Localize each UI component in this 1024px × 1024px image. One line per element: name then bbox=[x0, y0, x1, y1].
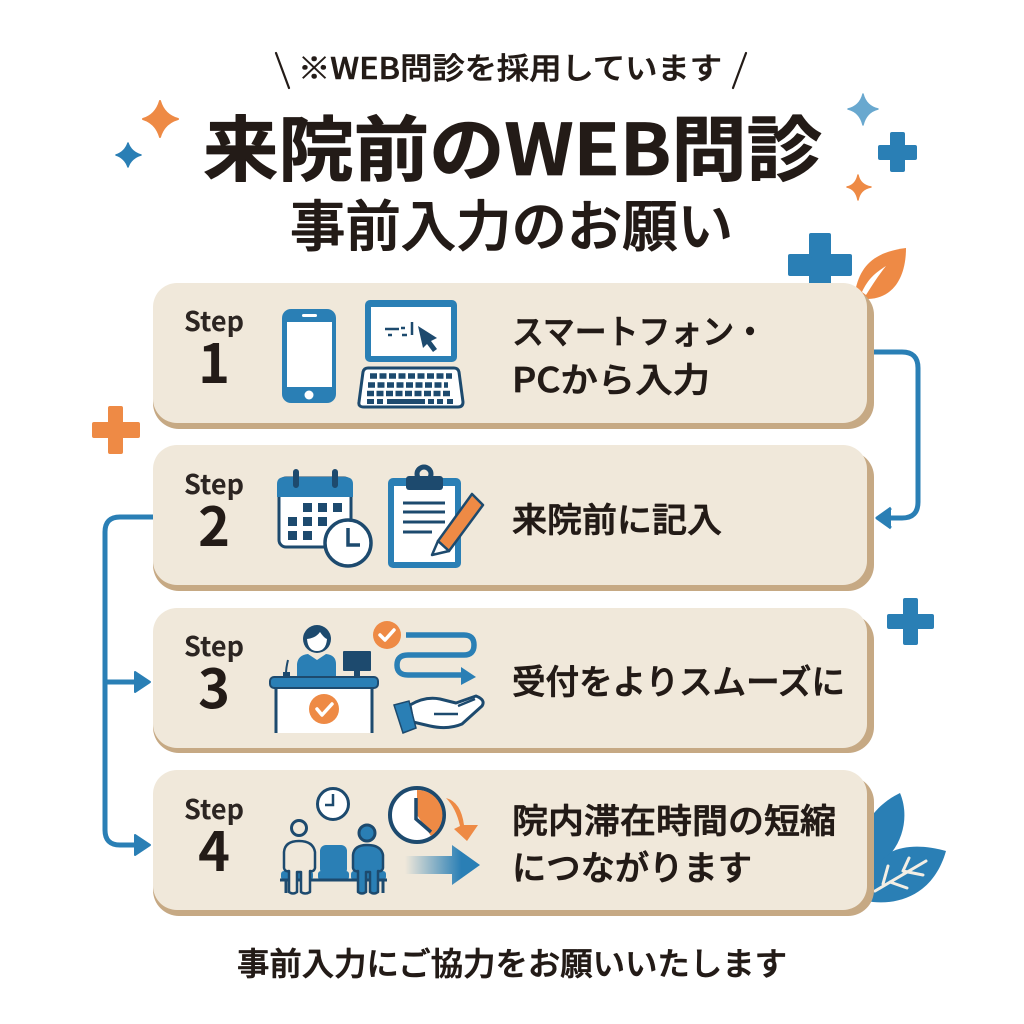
icon: blue leaves bbox=[860, 793, 946, 902]
step 2 label: Step bbox=[184, 463, 244, 502]
icon: light blue sparkle right bbox=[848, 94, 878, 125]
step 4 text: につながります bbox=[512, 841, 752, 890]
step 1 label: Step bbox=[184, 300, 244, 339]
step 4 number: 4 bbox=[198, 808, 230, 887]
icon: orange sparkle right bbox=[847, 175, 871, 200]
step 2 number: 2 bbox=[198, 483, 230, 562]
step 4 label: Step bbox=[184, 788, 244, 827]
step 1 text: PCから入力 bbox=[512, 353, 710, 402]
panel: step 3 bbox=[153, 608, 874, 753]
step 1 text: スマートフォン・ bbox=[512, 305, 766, 354]
icon: orange sparkle left bbox=[143, 101, 178, 137]
icon: laptop bbox=[359, 300, 463, 407]
icon: flow arrow bbox=[397, 635, 476, 685]
step 3 number: 3 bbox=[198, 645, 230, 724]
panel: step 4 bbox=[153, 770, 874, 916]
icon: clipboard and pencil bbox=[388, 467, 483, 568]
icon: smartphone bbox=[282, 309, 336, 403]
panel: step 2 bbox=[153, 445, 874, 591]
icon: small blue plus bbox=[880, 134, 915, 170]
icon: fading arrow bbox=[405, 845, 480, 885]
icon: blue sparkle left bbox=[116, 143, 141, 167]
icon: calendar with clock bbox=[277, 472, 371, 566]
title: 来院前のWEB問診 bbox=[203, 94, 822, 196]
footer message: 事前入力にご協力をお願いいたします bbox=[237, 939, 787, 985]
step 1 number: 1 bbox=[198, 320, 230, 399]
arrow: step 2 to steps 3 and 4 bbox=[105, 517, 155, 855]
step 4 text: 院内滞在時間の短縮 bbox=[512, 794, 836, 843]
icon: reception desk bbox=[270, 625, 378, 733]
icon: open hand bbox=[394, 696, 483, 733]
step 3 label: Step bbox=[184, 625, 244, 664]
icon: orange check bbox=[373, 621, 401, 649]
icon: shortened time clock bbox=[390, 788, 444, 842]
arrow: step 1 to step 2 bbox=[872, 352, 918, 528]
icon: curved orange arrow bbox=[446, 798, 478, 841]
icon: big blue plus bbox=[790, 235, 850, 287]
icon: blue plus right bbox=[889, 600, 932, 643]
subtitle: 事前入力のお願い bbox=[290, 182, 733, 262]
step 3 text: 受付をよりスムーズに bbox=[512, 655, 845, 704]
eyebrow text: ※WEB問診を採用しています bbox=[298, 44, 722, 88]
step 2 text: 来院前に記入 bbox=[512, 493, 722, 542]
panel: step 1 bbox=[153, 283, 874, 429]
icon: waiting room people bbox=[280, 788, 387, 894]
step 1 text bbox=[512, 305, 766, 402]
icon: orange leaf bbox=[855, 248, 906, 299]
step 4 text bbox=[512, 794, 836, 890]
icon: orange plus left bbox=[94, 408, 138, 452]
